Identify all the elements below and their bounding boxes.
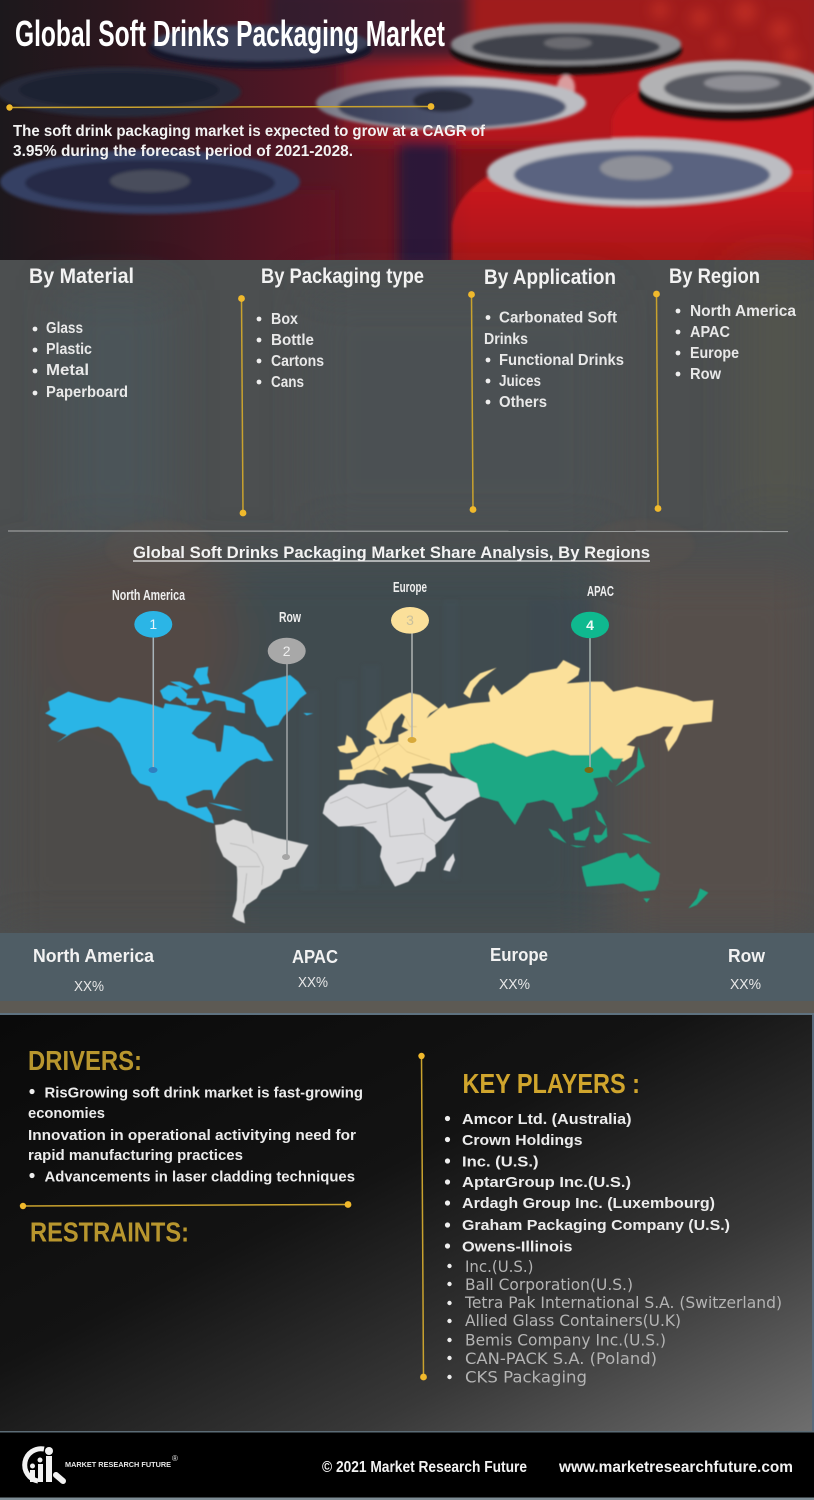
key players list: bold entries: Amcor Ltd. (Australia) [462,1111,632,1128]
category: by material [29,265,134,401]
category: by region: APAC [690,324,730,341]
map pin 2: row: 2 [283,643,291,659]
key players list: bold entries: Crown Holdings [462,1132,582,1149]
category: by region: North America [690,303,796,320]
category: by application: Carbonated Soft [499,310,618,326]
key players heading: KEY PLAYERS : [462,1068,640,1099]
map pin 3: europe: Europe [393,579,427,596]
category: by application: Others [499,394,547,411]
region: row africa and middle east [323,773,480,887]
hero title: Global Soft Drinks Packaging Market [15,13,445,54]
drivers list: Innovation in operational activitying need for [28,1127,356,1144]
gold column dividers [238,291,661,516]
key players list: bold entries: Inc. (U.S.) [462,1154,539,1170]
category: by packaging type: Bottle [271,332,314,349]
region: apac [450,743,708,908]
category: by packaging type: Cans [271,374,304,391]
key players list: light entries: CAN-PACK S.A. (Poland) [465,1349,657,1368]
drivers list: RisGrowing soft drink market is fast-growing [44,1084,363,1102]
category: by application [484,266,624,411]
hero description [13,123,486,160]
region: north america [45,667,313,823]
footer copyright: © 2021 Market Research Future [322,1459,527,1476]
key players list: light entries: CKS Packaging [465,1368,587,1386]
drivers list: economies [28,1105,105,1122]
drivers list: Advancements in laser cladding techniques [44,1168,355,1186]
drivers heading: DRIVERS: [28,1045,142,1076]
logo wordmark [65,1454,178,1469]
share: row: Row [728,946,766,966]
map pin 1: north america [112,587,185,773]
share: apac: XX% [298,974,328,991]
category: by material: Metal [46,362,89,379]
share: europe [490,945,548,993]
category: by region: Row [690,366,722,383]
category: by material: Plastic [46,341,92,358]
category: by packaging type: By Packaging type [261,265,424,288]
share: row [728,946,766,993]
category: by region [669,265,796,383]
map pin 4: apac [571,583,614,773]
share: north america: XX% [74,978,104,995]
key players list: bold entries: AptarGroup Inc.(U.S.) [462,1174,631,1191]
share: row: XX% [730,976,761,993]
key players list: bold entries: Graham Packaging Company (U.S.) [462,1217,730,1234]
region: europe and russia [337,660,713,780]
share: north america: North America [33,946,155,966]
hero panel: soda cans photo [0,0,814,270]
logo wordmark: MARKET RESEARCH FUTURE [65,1460,171,1469]
map pin 3: europe: 3 [406,612,414,628]
share: apac: APAC [292,947,338,967]
category: by material: Paperboard [46,384,128,401]
hero description: 3.95% during the forecast period of 2021-2028. [13,143,353,160]
key players list: light entries: Tetra Pak International S.A. (Switzerland) [464,1293,782,1312]
logo wordmark: ® [172,1454,178,1463]
hero divider with gold dots [6,103,434,111]
category: by region: Europe [690,345,739,362]
map pin 4: apac: APAC [587,583,614,600]
restraints heading: RESTRAINTS: [30,1216,189,1248]
map pin 1: north america: 1 [149,616,157,632]
world map [45,660,713,923]
share: apac [292,947,338,991]
category: by packaging type: Cartons [271,353,324,370]
category: by material: Glass [46,320,83,337]
map pin 2: row: Row [279,609,301,626]
share: europe: Europe [490,945,548,965]
category: by packaging type: Box [271,311,298,328]
footer bar [0,1431,814,1500]
category: by material: By Material [29,265,134,288]
drivers list [28,1084,363,1186]
key players list: bold entries [445,1111,730,1256]
map pin 4: apac: 4 [586,617,594,633]
category: by packaging type [257,265,424,391]
key players list: bold entries: Ardagh Group Inc. (Luxembourg) [462,1195,715,1212]
map pin 2: row [268,609,306,860]
key players list: light entries [447,1257,782,1386]
regional share band [0,933,814,1015]
map heading: Global Soft Drinks Packaging Market Share Analysis, By Regions [133,543,650,562]
lower panel background [0,1015,814,1431]
drivers divider [20,1201,351,1209]
footer website: www.marketresearchfuture.com [558,1459,793,1476]
map pin 1: north america: North America [112,587,185,604]
map pin 3: europe [391,579,429,743]
share: north america [33,946,155,995]
key players list: light entries: Bemis Company Inc.(U.S.) [465,1330,666,1350]
category: by application: Drinks [484,331,528,348]
key players divider [418,1053,427,1380]
hero description: The soft drink packaging market is expected to grow at a CAGR of [13,123,486,140]
icon: market research future logo [25,1447,63,1482]
key players list: light entries: Ball Corporation(U.S.) [465,1275,633,1294]
drivers list: rapid manufacturing practices [28,1147,243,1164]
category: by region: By Region [669,265,760,288]
middle panel background [0,260,814,1014]
category: by application: Juices [499,373,541,390]
key players list: light entries: Allied Glass Containers(U.K) [465,1311,681,1330]
category: by application: By Application [484,266,616,289]
region: row south america [215,819,308,923]
category: by application: Functional Drinks [499,352,624,369]
share: europe: XX% [499,976,530,993]
key players list: light entries: Inc.(U.S.) [465,1257,534,1276]
key players list: bold entries: Owens-Illinois [462,1238,572,1256]
